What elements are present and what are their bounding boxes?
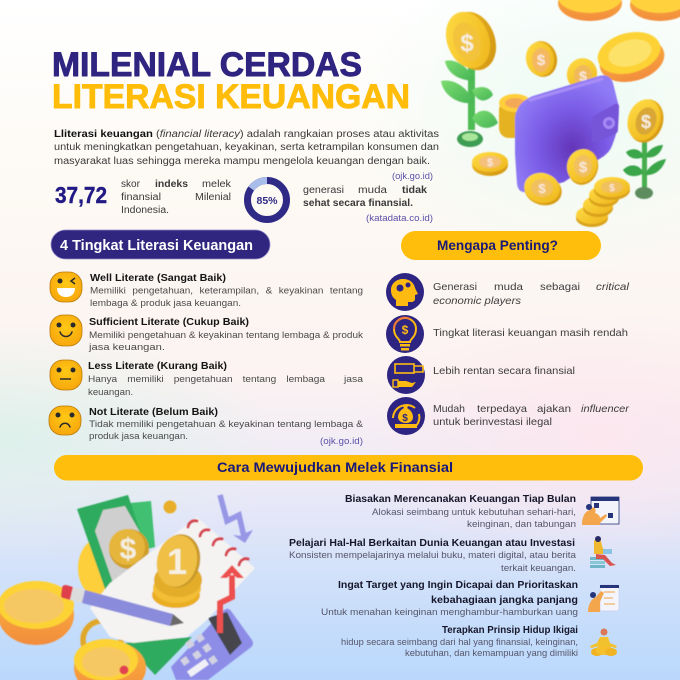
stat description: index score bbox=[121, 179, 232, 216]
level: well literate: lembaga & produk jasa keuangan. bbox=[90, 298, 241, 308]
level: less literate: Hanya memiliki pengetahuan tentang lembaga bbox=[88, 374, 325, 384]
icon: light bulb with dollar bbox=[386, 315, 424, 353]
reason: critical economic players: critical bbox=[596, 281, 630, 293]
icon: purple wallet bbox=[515, 75, 619, 192]
stat description: youth: tidak bbox=[402, 185, 427, 196]
stat description: youth: muda bbox=[358, 185, 388, 196]
illustration: wallet with coins and plants bbox=[438, 0, 680, 227]
level: less literate: Less Literate (Kurang Baik) bbox=[88, 360, 227, 372]
reason: illegal investment: ajakan bbox=[537, 403, 571, 415]
icon: large coin plant bbox=[438, 5, 504, 147]
icon: green backing sheet bbox=[125, 637, 192, 675]
stat description: youth: generasi bbox=[303, 185, 344, 196]
reason: illegal investment bbox=[387, 397, 630, 435]
donut chart: 85%: 85% bbox=[256, 195, 278, 207]
level: less literate: jasa bbox=[343, 374, 363, 384]
icon: coins in front of wallet: $ bbox=[538, 181, 546, 196]
icon: coin pile bbox=[576, 177, 630, 227]
reason: illegal investment: Mudah bbox=[433, 403, 465, 415]
reason: financially vulnerable: Lebih rentan secara finansial bbox=[433, 365, 575, 377]
icon: coin in wallet bbox=[562, 54, 602, 94]
level: well literate: Memiliki pengetahuan, keterampilan, & keyakinan tentang bbox=[90, 286, 363, 296]
tip: target and priority: Ingat Target yang Ingin Dicapai dan Prioritaskan bbox=[338, 580, 578, 591]
reason: low literacy: Tingkat literasi keuangan masih rendah bbox=[433, 327, 628, 339]
icon: money bag in hand bbox=[387, 397, 425, 435]
tip: learn finance: terkait keuangan. bbox=[501, 563, 576, 574]
icon: coin in wallet: $ bbox=[579, 68, 587, 84]
heading: 4 tingkat: 4 Tingkat Literasi Keuangan bbox=[60, 237, 253, 254]
level: not literate: Tidak memiliki pengetahuan & keyakinan tentang lembaga & bbox=[89, 419, 363, 429]
source: ojk levels: (ojk.go.id) bbox=[320, 436, 363, 447]
stat: 37,72: 37,72 bbox=[55, 182, 107, 208]
icon: ring bbox=[83, 621, 121, 659]
icon: red arrow up bbox=[220, 565, 244, 633]
level: well literate bbox=[50, 272, 363, 308]
icon: money and hand bbox=[387, 356, 425, 394]
icon: pencil bbox=[61, 585, 184, 626]
level: not literate: produk jasa keuangan. bbox=[89, 431, 188, 441]
tip: target and priority bbox=[321, 580, 619, 618]
intro paragraph: Lliterasi keuangan (financial literacy ) adalah rangkaian proses atau aktivitas bbox=[54, 129, 439, 140]
stat description: index score: skor bbox=[121, 179, 141, 190]
icon: pale coin left bbox=[0, 581, 74, 645]
icon: person pointing at board bbox=[588, 585, 619, 612]
tip: ikigai: kebutuhan, dan kemampuan yang dimiliki bbox=[405, 648, 578, 659]
icon: yellow ball bbox=[164, 500, 176, 514]
icon: floating coin: $ bbox=[537, 52, 546, 69]
level: sufficient literate: Memiliki pengetahuan & keyakinan tentang lembaga & produk bbox=[89, 330, 364, 340]
level: sufficient literate: jasa keuangan. bbox=[88, 342, 165, 352]
stat description: index score: Indonesia. bbox=[121, 205, 169, 216]
icon: coin stack behind wallet bbox=[499, 94, 531, 138]
stat description: index score: indeks bbox=[155, 179, 188, 190]
icon: calculator bbox=[171, 609, 253, 680]
icon: coins in front of wallet: $ bbox=[487, 157, 493, 169]
title: MILENIAL CERDAS bbox=[52, 46, 362, 84]
icon: large pale coin bbox=[593, 25, 669, 89]
reason: critical economic players: sebagai bbox=[540, 281, 580, 293]
icon: bottom coin bbox=[74, 639, 146, 680]
icon: red dot bbox=[120, 666, 128, 674]
icon: grinning face bbox=[50, 272, 82, 302]
icon: top cropped coins bbox=[558, 0, 680, 21]
donut chart: 85% bbox=[248, 180, 286, 220]
stat description: index score: Milenial bbox=[195, 192, 231, 203]
tip: monthly planning: Biasakan Merencanakan Keuangan Tiap Bulan bbox=[345, 494, 576, 505]
tip: target and priority: Untuk menahan keinginan menghambur-hamburkan uang bbox=[321, 607, 578, 618]
tip: ikigai: hidup secara seimbang dari hal yang finansial, keinginan, bbox=[341, 637, 578, 648]
level: sufficient literate bbox=[50, 315, 364, 352]
level: well literate: Well Literate (Sangat Baik) bbox=[90, 272, 226, 284]
tip: monthly planning: keinginan, dan tabungan bbox=[467, 519, 576, 530]
icon: lavender arrow down bbox=[220, 495, 253, 543]
icon: neutral face bbox=[50, 360, 82, 390]
source: ojk: (ojk.go.id) bbox=[392, 171, 433, 182]
icon: small coin plant: $ bbox=[641, 112, 651, 132]
tip: target and priority: kebahagiaan jangka panjang bbox=[431, 595, 578, 606]
intro paragraph line 3: masyarakat luas sehingga mereka mampu mengelola keuangan dengan baik. bbox=[54, 156, 430, 167]
level: not literate bbox=[49, 406, 363, 441]
heading: mengapa penting bbox=[401, 231, 601, 260]
reason: illegal investment: untuk berinvestasi ilegal bbox=[433, 416, 552, 428]
illustration: notebook, money and calculator bbox=[0, 495, 255, 680]
tip: learn finance: Pelajari Hal-Hal Berkaitan Dunia Keuangan atau Investasi bbox=[289, 538, 575, 549]
stat description: index score: melek bbox=[202, 179, 232, 190]
stat description: index score: finansial bbox=[121, 192, 161, 203]
icon: coin pile: $ bbox=[609, 183, 615, 194]
icon: banknotes: $ bbox=[120, 533, 137, 566]
level: not literate: Not Literate (Belum Baik) bbox=[89, 406, 218, 418]
intro paragraph line 2: untuk meningkatkan pengetahuan, keyakinan, serta ketrampilan konsumen dan bbox=[54, 142, 439, 153]
icon: coins in front of wallet bbox=[472, 146, 602, 209]
icon: large coin plant: $ bbox=[460, 30, 474, 57]
icon: head with gears bbox=[386, 273, 424, 311]
icon: coin behind bill bbox=[78, 537, 126, 599]
title bbox=[52, 46, 410, 116]
heading: cara mewujudkan bbox=[54, 455, 643, 480]
heading: cara mewujudkan: Cara Mewujudkan Melek Finansial bbox=[217, 459, 453, 475]
level: less literate bbox=[50, 360, 363, 397]
title: LITERASI KEUANGAN bbox=[52, 78, 410, 116]
heading: 4 tingkat bbox=[51, 230, 270, 259]
level: less literate: keuangan. bbox=[88, 387, 133, 397]
stat description: youth bbox=[303, 185, 427, 209]
tip: learn finance bbox=[289, 536, 616, 574]
reason: critical economic players: economic players bbox=[433, 295, 522, 307]
icon: coin stack with number 1 bbox=[152, 530, 205, 608]
heading: mengapa penting: Mengapa Penting? bbox=[437, 237, 558, 253]
tip: monthly planning bbox=[345, 494, 619, 530]
icon: coin stack with number 1: 1 bbox=[167, 541, 187, 582]
reason: low literacy bbox=[386, 315, 628, 353]
icon: person with calendar bbox=[582, 497, 619, 525]
reason: critical economic players: muda bbox=[494, 281, 523, 293]
icon: coins in front of wallet: $ bbox=[579, 159, 588, 176]
icon: smiling face bbox=[50, 315, 82, 346]
reason: financially vulnerable bbox=[387, 356, 575, 394]
source: katadata: (katadata.co.id) bbox=[366, 213, 433, 224]
reason: critical economic players bbox=[386, 273, 630, 311]
tip: monthly planning: Alokasi seimbang untuk kebutuhan sehari-hari, bbox=[372, 507, 576, 518]
tip: learn finance: Konsisten mempelajarinya melalui buku, materi digital, atau berita bbox=[289, 550, 577, 561]
tip: ikigai: Terapkan Prinsip Hidup Ikigai bbox=[442, 625, 578, 636]
icon: floating coin bbox=[523, 38, 560, 80]
icon: meditating woman on coins bbox=[590, 628, 617, 656]
tip: ikigai bbox=[341, 625, 617, 659]
level: sufficient literate: Sufficient Literate (Cukup Baik) bbox=[89, 316, 249, 328]
reason: illegal investment: terpedaya bbox=[477, 403, 527, 415]
icon: small coin plant bbox=[622, 95, 669, 199]
icon: sad face bbox=[49, 406, 81, 435]
icon: spiral rings bbox=[188, 521, 248, 565]
stat description: youth: sehat secara finansial. bbox=[303, 198, 413, 209]
reason: critical economic players: Generasi bbox=[433, 281, 477, 293]
icon: money bag in hand: $ bbox=[402, 413, 408, 424]
icon: notebook paper bbox=[90, 517, 255, 643]
icon: light bulb with dollar: $ bbox=[402, 323, 409, 337]
reason: illegal investment: influencer bbox=[581, 403, 630, 415]
icon: woman reading on books bbox=[590, 536, 616, 568]
icon: banknotes bbox=[77, 495, 155, 603]
